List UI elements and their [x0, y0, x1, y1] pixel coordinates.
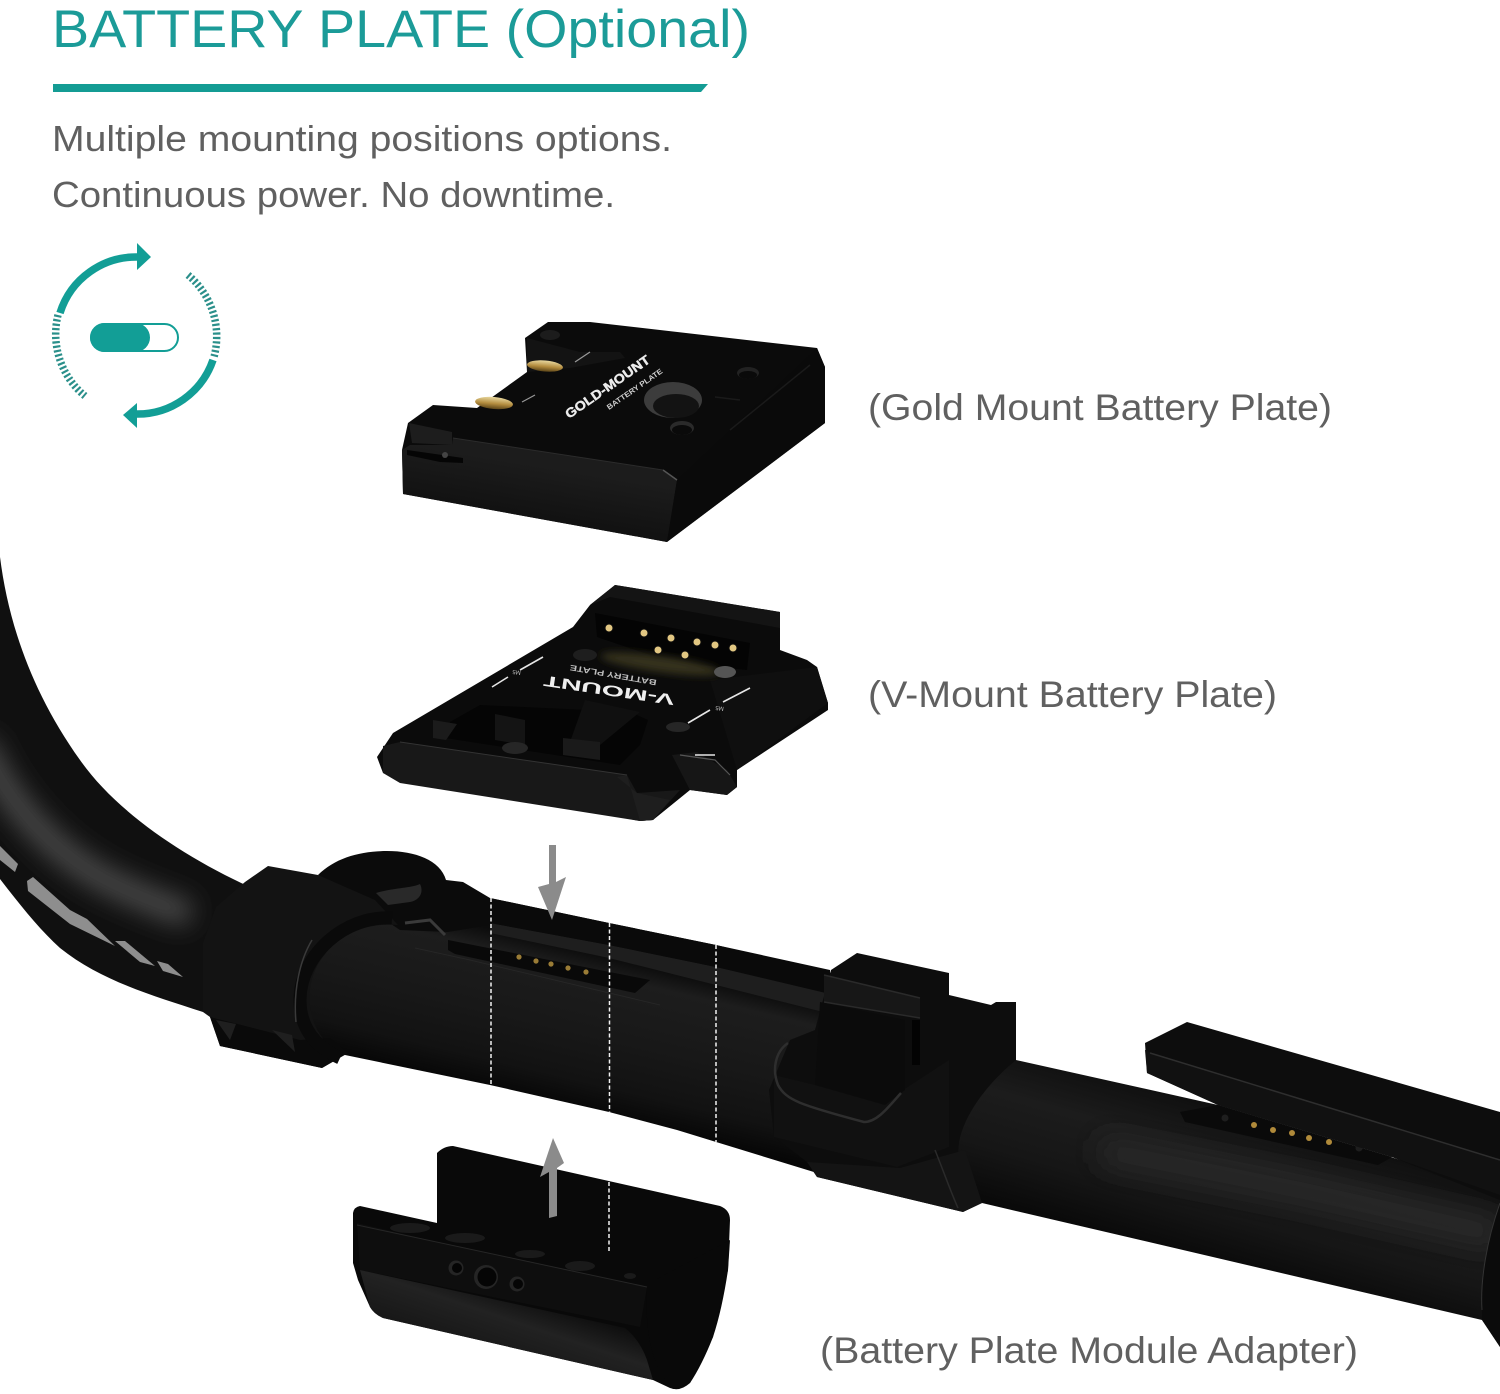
connector plate with pogo pins: [1180, 1105, 1392, 1165]
second clamp with latch: [769, 953, 1016, 1212]
label: v-mount: (V-Mount Battery Plate): [868, 674, 1277, 715]
icon: hot-swap toggle: [56, 243, 217, 428]
plate lettering: gold-mount: GOLD-MOUNT: [562, 352, 653, 421]
title underline: [53, 84, 708, 92]
reflective strips: [0, 846, 183, 977]
main tube: [290, 898, 860, 1180]
plate lettering: v-mount: V-MOUNT: [543, 672, 676, 708]
v-mount battery plate: M5: [715, 704, 724, 711]
upper clip arm: [1145, 1022, 1500, 1200]
dotted alignment guides: [491, 898, 716, 1252]
curved handle arm: [0, 557, 250, 1020]
right collar edge: [1482, 1203, 1500, 1347]
battery plate module adapter: [353, 1146, 730, 1389]
title: BATTERY PLATE (Optional): [52, 0, 750, 59]
arrow: down onto tube: [538, 845, 566, 920]
description text: [52, 118, 672, 215]
label: gold mount: (Gold Mount Battery Plate): [868, 387, 1332, 428]
arrow: up into tube: [540, 1138, 564, 1218]
label: adapter: (Battery Plate Module Adapter): [820, 1330, 1358, 1371]
v-mount battery plate: [377, 585, 828, 821]
connector plate with pogo pins: [448, 940, 650, 993]
gold mount battery plate: [402, 322, 825, 542]
description text: Continuous power. No downtime.: [52, 174, 615, 215]
description text: Multiple mounting positions options.: [52, 118, 672, 159]
gold mount battery plate: BATTERY PLATE: [605, 367, 664, 412]
v-mount battery plate: M5: [512, 668, 521, 675]
left collar and dial: [203, 851, 490, 1068]
v-mount battery plate: BATTERY PLATE: [568, 663, 657, 687]
right tube: [930, 1060, 1500, 1347]
